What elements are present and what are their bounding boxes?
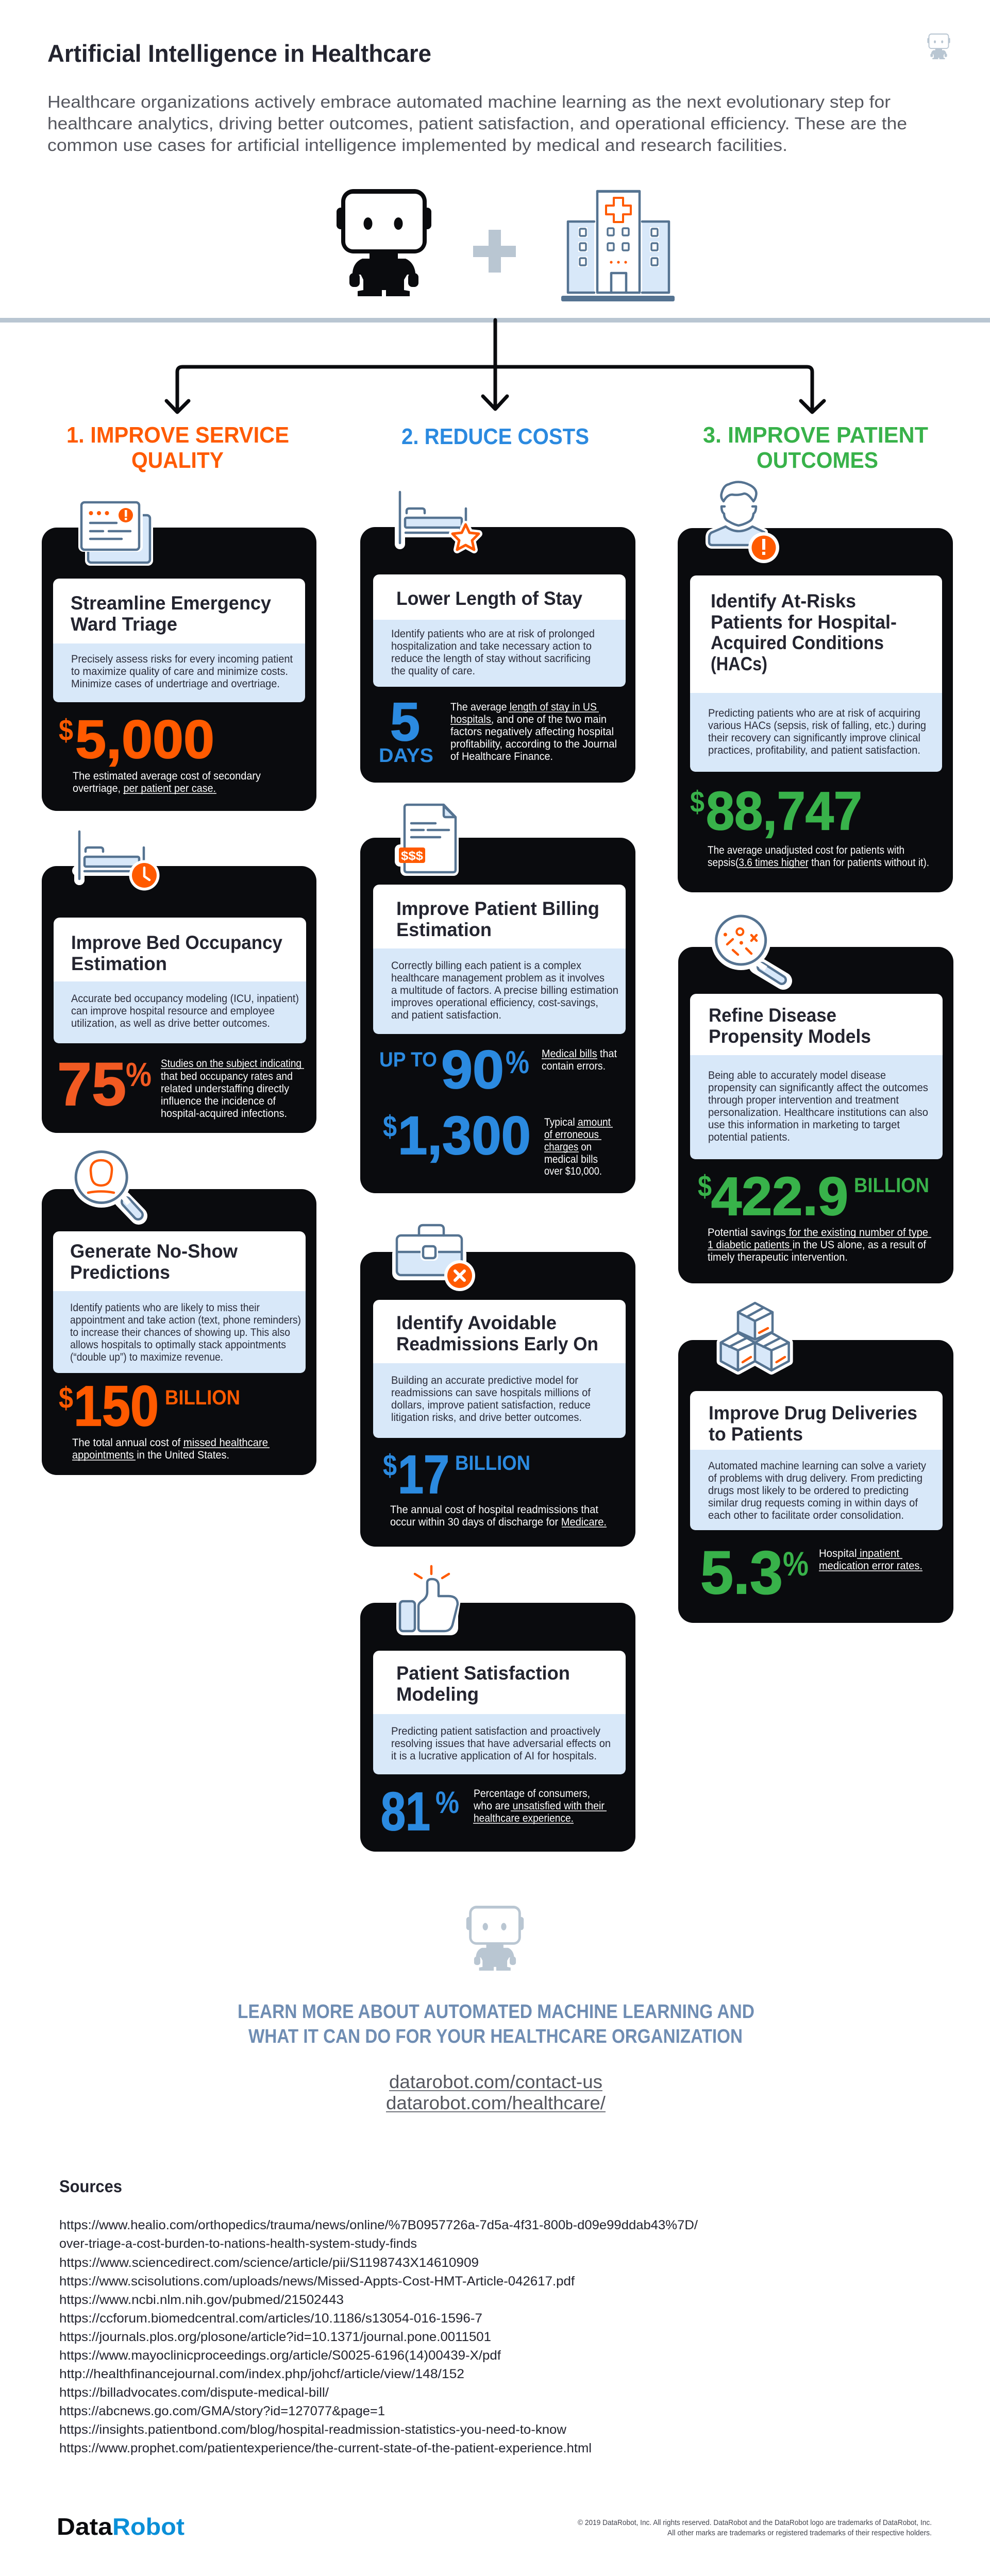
links: datarobot.com/contact-us <box>389 2071 602 2092</box>
panel: patient satisfaction modeling <box>360 1566 635 1852</box>
card title: Predictions <box>70 1262 170 1283</box>
panel: streamline emergency ward triage <box>42 499 316 811</box>
logo: DataRobot: Robot <box>112 2513 184 2540</box>
stat: $150 billion: $ <box>59 1381 73 1415</box>
icon: person with alert <box>709 482 779 563</box>
panel: identify avoidable readmissions early on <box>360 1225 635 1547</box>
stat caption: Studies on the subject indicating <box>161 1058 301 1070</box>
text box <box>690 1391 943 1530</box>
stat caption: factors negatively affecting hospital <box>450 726 614 738</box>
text box <box>53 1231 306 1373</box>
sources list: https://abcnews.go.com/GMA/story?id=127077&page=1 <box>59 2404 385 2418</box>
stat: 5.3%: 5.3 <box>700 1539 783 1607</box>
stat caption: healthcare experience. <box>474 1812 574 1824</box>
stat caption: related understaffing directly <box>161 1083 289 1095</box>
stat caption: medication error rates. <box>819 1560 922 1572</box>
stat: up to 90%: 90 <box>441 1040 504 1100</box>
card title: Estimation <box>396 919 492 940</box>
stat: $88,747: 88,747 <box>706 781 862 841</box>
stat: $150 billion: 150 <box>74 1375 159 1438</box>
icon: plus sign <box>473 230 516 273</box>
heading: category 1: QUALITY <box>131 448 224 473</box>
description band <box>54 981 306 1043</box>
stat: 75%: % <box>126 1056 152 1093</box>
stat: 81%: 81 <box>381 1782 430 1842</box>
description <box>71 653 293 690</box>
links: datarobot.com/healthcare/ <box>386 2092 606 2113</box>
icon: magnifier with germs <box>711 910 783 981</box>
sources heading: Sources <box>59 2177 122 2196</box>
description: dollars, improve patient satisfaction, reduce <box>391 1399 591 1411</box>
stat caption: profitability, according to the Journal <box>450 738 617 750</box>
card title: Patients for Hospital- <box>711 612 897 633</box>
divider bar <box>0 318 990 323</box>
description: to increase their chances of showing up. This also <box>70 1327 290 1338</box>
description: hospitalization and take necessary action to <box>391 640 592 652</box>
card title: Identify At-Risks <box>711 590 856 612</box>
heading: category 2: 2. REDUCE COSTS <box>401 424 589 449</box>
description <box>708 707 926 756</box>
description: use this information in marketing to target <box>708 1119 900 1131</box>
text box <box>373 1651 626 1774</box>
description: each other to facilitate order consolidation. <box>708 1510 904 1521</box>
stat caption: Hospital inpatient <box>819 1548 899 1560</box>
icon: bed with star <box>395 492 479 550</box>
sources list: http://healthfinancejournal.com/index.php/johcf/article/view/148/152 <box>59 2367 464 2381</box>
card title: Improve Bed Occupancy <box>71 932 282 953</box>
description: Identify patients who are at risk of prolonged <box>391 628 595 640</box>
stat: 5 days: DAYS <box>379 745 433 767</box>
title: Artificial Intelligence in Healthcare <box>47 40 431 67</box>
intro paragraph: healthcare analytics, driving better outcomes, patient satisfaction, and operational efficiency. These are the <box>47 114 907 133</box>
heading: category 1 <box>66 422 289 473</box>
description: their recovery can significantly improve clinical <box>708 732 920 744</box>
card title: Identify Avoidable <box>396 1312 557 1333</box>
icon: bed with clock <box>77 832 160 890</box>
description: Predicting patient satisfaction and proactively <box>391 1725 600 1737</box>
card title: Improve Patient Billing <box>396 898 599 919</box>
stat: $422.9 billion <box>698 1166 929 1227</box>
description band <box>690 1450 943 1530</box>
card title: Improve Drug Deliveries <box>709 1402 917 1423</box>
sources list: https://insights.patientbond.com/blog/hospital-readmission-statistics-you-need-to-know <box>59 2422 567 2437</box>
stat caption: erroneous charges: medical bills <box>544 1154 598 1165</box>
description band <box>373 1363 626 1438</box>
description: Identify patients who are likely to miss their <box>70 1302 260 1314</box>
stat caption <box>450 701 617 762</box>
card title: Lower Length of Stay <box>396 588 582 609</box>
sources list <box>59 2218 698 2455</box>
panel: refine disease propensity models <box>678 910 953 1283</box>
stat caption: erroneous charges: charges on <box>544 1141 592 1153</box>
card title <box>71 932 282 974</box>
description <box>391 960 618 1021</box>
description <box>391 628 595 677</box>
description: (“double up”) to maximize revenue. <box>70 1351 223 1363</box>
description band <box>53 1291 306 1373</box>
stat caption: 1 diabetic patients in the US alone, as a result of <box>708 1239 926 1251</box>
intro paragraph <box>47 92 907 155</box>
description <box>391 1725 611 1762</box>
stat: $17 billion: BILLION <box>455 1452 530 1475</box>
description: drugs most likely to be ordered to predicting <box>708 1485 909 1497</box>
stat caption: appointments in the United States. <box>72 1449 229 1461</box>
description: the quality of care. <box>391 665 475 677</box>
description: and patient satisfaction. <box>391 1009 501 1021</box>
stat caption: occur within 30 days of discharge for Medicare. <box>390 1516 607 1528</box>
icon: invoice with dollars <box>395 805 459 876</box>
stat caption: The annual cost of hospital readmissions that <box>390 1504 598 1516</box>
stat caption: The total annual cost of missed healthcare <box>72 1437 268 1449</box>
stat caption <box>161 1058 304 1120</box>
stat: 5 days <box>379 692 433 767</box>
card title: Ward Triage <box>71 614 177 635</box>
sources list: https://www.healio.com/orthopedics/trauma/news/online/%7B0957726a-7d5a-4f31-800b-d09e99ddab43%7D/ <box>59 2218 698 2232</box>
stat: $17 billion: 17 <box>398 1445 449 1505</box>
stat: $422.9 billion: $ <box>698 1170 712 1203</box>
card title: Acquired Conditions <box>711 632 884 653</box>
sources list: https://www.mayoclinicproceedings.org/article/S0025-6196(14)00439-X/pdf <box>59 2348 501 2363</box>
stat: up to 90%: % <box>506 1045 529 1080</box>
icon: alert documents <box>78 499 153 566</box>
links <box>386 2071 606 2113</box>
description band <box>373 948 626 1034</box>
stat caption: erroneous charges: over $10,000. <box>544 1165 602 1177</box>
description: Precisely assess risks for every incoming patient <box>71 653 293 665</box>
text box <box>690 994 943 1159</box>
stat caption <box>73 770 261 794</box>
panel: generate no-show predictions <box>42 1147 316 1475</box>
description: potential patients. <box>708 1131 790 1143</box>
card title <box>71 592 271 635</box>
card title: Streamline Emergency <box>71 592 271 614</box>
stat caption: hospitals, and one of the two main <box>450 714 607 725</box>
sources list: https://www.scisolutions.com/uploads/news/Missed-Appts-Cost-HMT-Article-042617.pdf <box>59 2274 575 2289</box>
stat caption: influence the incidence of <box>161 1095 276 1107</box>
sources list: over-triage-a-cost-burden-to-nations-health-system-study-finds <box>59 2236 417 2251</box>
stat caption <box>473 1788 607 1824</box>
call to action heading: WHAT IT CAN DO FOR YOUR HEALTHCARE ORGANIZATION <box>248 2026 743 2047</box>
card title: (HACs) <box>711 653 767 674</box>
card title: Modeling <box>396 1684 479 1705</box>
icon: stacked boxes <box>721 1303 789 1370</box>
description: various HACs (sepsis, risk of falling, etc.) during <box>708 720 926 732</box>
card title <box>711 590 897 674</box>
copyright: All other marks are trademarks or registered trademarks of their respective holders. <box>667 2529 932 2537</box>
stat: 5 days: 5 <box>390 692 420 752</box>
stat caption: timely therapeutic intervention. <box>708 1251 848 1263</box>
card title <box>396 898 599 940</box>
stat caption: of Healthcare Finance. <box>450 751 553 762</box>
description: Correctly billing each patient is a complex <box>391 960 581 972</box>
stat caption <box>708 1227 931 1263</box>
description: Accurate bed occupancy modeling (ICU, inpatient) <box>71 993 299 1005</box>
description: Predicting patients who are at risk of acquiring <box>708 707 920 719</box>
stat caption: Potential savings for the existing number of type <box>708 1227 928 1239</box>
card title: Generate No-Show <box>70 1241 238 1262</box>
stat: $150 billion <box>59 1375 240 1438</box>
arrows: tree to three categories <box>166 320 824 412</box>
text box <box>373 885 626 1034</box>
card title <box>396 1663 570 1705</box>
description: resolving issues that have adversarial effects on <box>391 1738 611 1750</box>
description: of problems with drug delivery. From predicting <box>708 1472 922 1484</box>
sources list: https://www.ncbi.nlm.nih.gov/pubmed/21502443 <box>59 2293 344 2307</box>
logo: DataRobot <box>57 2513 184 2540</box>
stat caption: Percentage of consumers, <box>474 1788 590 1800</box>
heading: category 3: 3. IMPROVE PATIENT <box>703 422 928 448</box>
stat caption: The average length of stay in US <box>450 701 597 713</box>
description <box>391 1375 591 1423</box>
description <box>70 1302 301 1363</box>
stat caption: erroneous charges: Typical amount <box>544 1116 611 1128</box>
intro paragraph: Healthcare organizations actively embrace automated machine learning as the next evolutionary step for <box>47 92 891 111</box>
icon: invoice with dollars: $$$ <box>401 849 424 863</box>
stat caption: medical bills <box>542 1048 617 1072</box>
card title <box>709 1402 917 1445</box>
description: practices, profitability, and patient satisfaction. <box>708 744 920 756</box>
call to action heading <box>238 2001 754 2047</box>
description: utilization, as well as drive better outcomes. <box>71 1018 270 1029</box>
text box <box>373 574 626 687</box>
stat caption: sepsis(3.6 times higher than for patients without it). <box>708 857 929 869</box>
stat caption <box>390 1504 607 1528</box>
stat: $88,747: $ <box>690 785 704 819</box>
stat caption <box>708 844 929 869</box>
copyright <box>578 2518 932 2537</box>
stat caption: erroneous charges: of erroneous <box>544 1129 599 1141</box>
heading: category 1: 1. IMPROVE SERVICE <box>66 422 289 448</box>
description: Building an accurate predictive model for <box>391 1375 578 1386</box>
panel: improve drug deliveries to patients <box>678 1303 953 1623</box>
sources list: https://www.prophet.com/patientexperience/the-current-state-of-the-patient-experience.html <box>59 2441 592 2455</box>
copyright: © 2019 DataRobot, Inc. All rights reserved. DataRobot and the DataRobot logo are trademarks of DataRobot, Inc. <box>578 2518 932 2527</box>
stat: up to 90% <box>379 1040 529 1100</box>
card title <box>396 1312 598 1354</box>
description: readmissions can save hospitals millions of <box>391 1387 591 1399</box>
stat caption: medical bills: contain errors. <box>542 1060 606 1072</box>
logo: DataRobot: Data <box>57 2513 112 2540</box>
stat: 5.3%: % <box>783 1545 809 1583</box>
description: allows hospitals to optimally stack appointments <box>70 1339 286 1351</box>
card title <box>709 1005 871 1047</box>
description: it is a lucrative application of AI for hospitals. <box>391 1750 597 1762</box>
intro paragraph: common use cases for artificial intelligence implemented by medical and research facilities. <box>47 135 787 155</box>
icon: big robot <box>337 189 431 296</box>
sources list: https://journals.plos.org/plosone/article?id=10.1371/journal.pone.0011501 <box>59 2330 491 2344</box>
description band <box>690 693 942 772</box>
call to action heading: LEARN MORE ABOUT AUTOMATED MACHINE LEARNING AND <box>238 2001 754 2023</box>
description: can improve hospital resource and employee <box>71 1005 275 1017</box>
sources list: https://ccforum.biomedcentral.com/articles/10.1186/s13054-016-1596-7 <box>59 2311 482 2326</box>
card title: Readmissions Early On <box>396 1333 598 1354</box>
description: Minimize cases of undertriage and overtriage. <box>71 678 280 690</box>
stat caption: The estimated average cost of secondary <box>73 770 261 782</box>
description: improves operational efficiency, cost-savings, <box>391 997 598 1009</box>
text box <box>54 918 306 1043</box>
stat caption: who are unsatisfied with their <box>473 1800 605 1812</box>
description: appointment and take action (text, phone reminders) <box>70 1314 301 1326</box>
description: similar drug requests coming in within days of <box>708 1497 918 1509</box>
stat: $1,300: 1,300 <box>398 1106 531 1166</box>
card title <box>70 1241 238 1283</box>
stat: $150 billion: BILLION <box>165 1386 240 1409</box>
icon: briefcase with x <box>392 1225 475 1291</box>
panel: improve bed occupancy estimation <box>42 832 316 1133</box>
icon: footer robot <box>466 1906 524 1971</box>
description: to maximize quality of care and minimize costs. <box>71 666 288 677</box>
text box <box>53 579 305 702</box>
stat: $5,000: $ <box>59 714 73 747</box>
panel: lower length of stay <box>360 492 635 783</box>
stat: $1,300: $ <box>383 1110 397 1143</box>
panel: identify at-risk patients for HACs <box>678 482 953 892</box>
description band <box>690 1055 943 1159</box>
stat caption <box>819 1548 922 1572</box>
stat caption: hospital-acquired infections. <box>161 1108 287 1120</box>
stat: $422.9 billion: BILLION <box>854 1174 929 1197</box>
heading: category 3 <box>703 422 928 473</box>
text box <box>373 1300 626 1438</box>
description: Being able to accurately model disease <box>708 1070 886 1081</box>
stat caption: overtriage, per patient per case. <box>73 783 216 794</box>
description band <box>373 1714 626 1774</box>
stat: $5,000: 5,000 <box>75 709 214 770</box>
description <box>71 993 299 1029</box>
heading: category 3: OUTCOMES <box>757 448 878 473</box>
description band <box>53 643 305 702</box>
description <box>708 1070 928 1143</box>
stat caption <box>72 1437 270 1461</box>
description band <box>373 620 626 687</box>
stat: $17 billion <box>383 1445 530 1505</box>
description: through proper intervention and treatment <box>708 1094 899 1106</box>
sources list: https://billadvocates.com/dispute-medical-bill/ <box>59 2385 329 2400</box>
sources list: https://www.sciencedirect.com/science/article/pii/S1198743X14610909 <box>59 2256 479 2270</box>
card title: Patient Satisfaction <box>396 1663 570 1684</box>
icon: small robot top right <box>927 33 950 59</box>
card title: Estimation <box>71 953 167 974</box>
stat caption: The average unadjusted cost for patients with <box>708 844 904 856</box>
description: a multitude of factors. A precise billing estimation <box>391 985 618 996</box>
icon: magnifier with person <box>71 1147 139 1216</box>
stat: up to 90%: UP TO <box>379 1048 437 1071</box>
stat: $422.9 billion: 422.9 <box>711 1166 848 1227</box>
text box <box>690 575 942 772</box>
stat caption: medical bills: Medical bills that <box>542 1048 617 1060</box>
stat caption: erroneous charges <box>544 1116 613 1177</box>
card title: to Patients <box>709 1423 803 1445</box>
stat: 81%: % <box>435 1785 459 1820</box>
card title: Refine Disease <box>709 1005 836 1026</box>
icon: hospital <box>561 191 675 301</box>
description: reduce the length of stay without sacrificing <box>391 653 591 665</box>
description: litigation risks, and drive better outcomes. <box>391 1412 582 1423</box>
description: Automated machine learning can solve a variety <box>708 1460 926 1472</box>
panel: improve patient billing estimation <box>360 805 635 1193</box>
description: personalization. Healthcare institutions can also <box>708 1107 928 1118</box>
stat caption: that bed occupancy rates and <box>161 1071 293 1082</box>
description: healthcare management problem as it involves <box>391 972 605 984</box>
description <box>708 1460 926 1521</box>
card title: Propensity Models <box>709 1026 871 1047</box>
stat: 75%: 75 <box>57 1050 126 1118</box>
stat: $17 billion: $ <box>383 1449 397 1482</box>
description: propensity can significantly affect the outcomes <box>708 1082 928 1094</box>
icon: thumbs up <box>396 1566 458 1635</box>
